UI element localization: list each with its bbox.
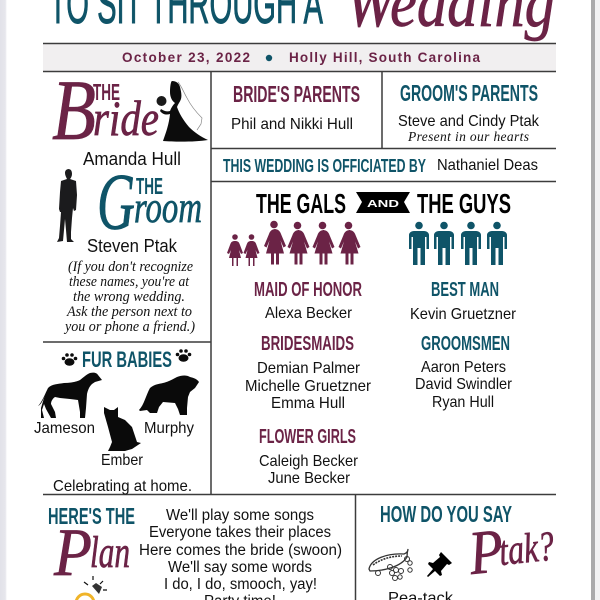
panel: officiant <box>223 156 538 176</box>
flower girls: Caleigh Becker <box>259 453 359 470</box>
heading: the gals and the guys <box>256 188 511 219</box>
date and location band: Holly Hill, South Carolina <box>289 50 480 65</box>
groomsmen: Ryan Hull <box>432 394 494 411</box>
text: order of events <box>139 507 342 600</box>
groomsmen: David Swindler <box>415 376 513 393</box>
note: wrong wedding joke: these names, you're at <box>69 274 190 290</box>
heading: officiated by: THIS WEDDING IS OFFICIATED BY <box>223 156 426 176</box>
note: wrong wedding joke: you or phone a friend.) <box>63 319 195 335</box>
groomsmen: Aaron Peters <box>421 359 506 376</box>
groomsmen: GROOMSMEN <box>421 333 510 355</box>
date and location band <box>43 44 556 72</box>
heading: the bride <box>52 62 159 158</box>
note: wrong wedding joke: Ask the person next to <box>66 304 192 320</box>
script: Ptak?: P <box>465 517 507 588</box>
heading: here's the plan: HERE'S THE <box>48 503 135 529</box>
note: wrong wedding joke: (If you don't recognize <box>68 259 193 275</box>
panel: wedding party <box>227 188 517 487</box>
panel: the groom <box>57 159 202 335</box>
panel: fur babies <box>34 347 199 495</box>
panel: groom's parents <box>398 80 540 144</box>
heading: bride's parents: BRIDE'S PARENTS <box>233 81 360 107</box>
bridesmaids: Michelle Gruetzner <box>245 378 372 395</box>
icon row: women <box>227 221 360 266</box>
script: Ptak?: tak? <box>497 524 556 575</box>
heading: the groom: room <box>134 183 202 232</box>
bridesmaids: BRIDESMAIDS <box>261 333 354 355</box>
text: order of events: I do, I do, smooch, yay! <box>164 576 317 593</box>
note: wrong wedding joke <box>63 259 195 335</box>
icon: pea pod <box>369 549 412 580</box>
note: wrong wedding joke: the wrong wedding. <box>73 289 185 305</box>
heading: the groom: G <box>97 159 135 247</box>
icon: Murphy the dog <box>139 376 199 415</box>
bridesmaids: Emma Hull <box>271 395 345 412</box>
heading: the groom: THE <box>136 173 163 199</box>
names: bride's parents: Phil and Nikki Hull <box>231 116 353 133</box>
icon: right paw <box>176 349 191 362</box>
heading: here's the plan <box>48 503 135 590</box>
text: order of events: Here comes the bride (swoon) <box>139 542 342 559</box>
heading: here's the plan: P <box>53 514 92 590</box>
flower girls <box>259 426 359 487</box>
panel: here's the plan <box>48 503 342 600</box>
text: order of events: We'll play some songs <box>166 507 314 524</box>
heading: the bride: ride <box>93 90 159 146</box>
heading: the bride: B <box>52 62 96 158</box>
heading: the gals and the guys: THE GUYS <box>417 188 511 219</box>
maid of honor: Alexa Becker <box>265 305 353 322</box>
label: Murphy: Murphy <box>144 420 194 437</box>
icon row: men <box>409 222 507 265</box>
name: Amanda Hull: Amanda Hull <box>83 149 181 169</box>
caption: celebrating at home: Celebrating at home. <box>53 478 192 495</box>
icon: diamond ring <box>76 576 107 600</box>
heading: the gals and the guys: AND <box>367 198 400 210</box>
icon: groom silhouette <box>57 169 77 242</box>
groomsmen <box>415 333 513 411</box>
panel: bride's parents <box>231 81 360 133</box>
heading: the bride: THE <box>93 79 120 105</box>
panel: how do you say ptak <box>369 501 557 600</box>
heading: how do you say: HOW DO YOU SAY <box>380 501 512 527</box>
icon: bride silhouette <box>156 81 208 142</box>
flower girls: June Becker <box>268 470 351 487</box>
note: present in our hearts: Present in our hearts <box>407 129 529 144</box>
best man: Kevin Gruetzner <box>410 306 517 323</box>
bridesmaids <box>245 333 372 412</box>
icon: left paw <box>62 353 77 366</box>
heading: here's the plan: lan <box>90 528 130 577</box>
icon: thumb tack <box>427 552 452 577</box>
heading: fur babies: FUR BABIES <box>82 347 172 372</box>
label: Jameson: Jameson <box>34 420 95 437</box>
flower girls: FLOWER GIRLS <box>259 426 356 448</box>
text: order of events: Everyone takes their places <box>149 524 331 541</box>
panel: the bride <box>52 62 208 169</box>
maid of honor <box>254 279 362 322</box>
icon: Jameson the dog <box>38 373 102 418</box>
date and location band: October 23, 2022 <box>122 50 250 65</box>
heading: the groom <box>97 159 202 247</box>
best man <box>410 279 517 323</box>
label: Ember: Ember <box>101 452 144 469</box>
name: officiant: Nathaniel Deas <box>437 157 538 174</box>
best man: BEST MAN <box>431 279 499 301</box>
name: Steven Ptak: Steven Ptak <box>87 236 178 256</box>
maid of honor: MAID OF HONOR <box>254 279 362 301</box>
bridesmaids: Demian Palmer <box>257 360 361 377</box>
heading: the gals and the guys: THE GALS <box>256 188 346 219</box>
names: groom's parents: Steve and Cindy Ptak <box>398 113 540 130</box>
text: order of events: We'll say some words <box>168 559 312 576</box>
icon: Ember the cat <box>104 407 141 451</box>
